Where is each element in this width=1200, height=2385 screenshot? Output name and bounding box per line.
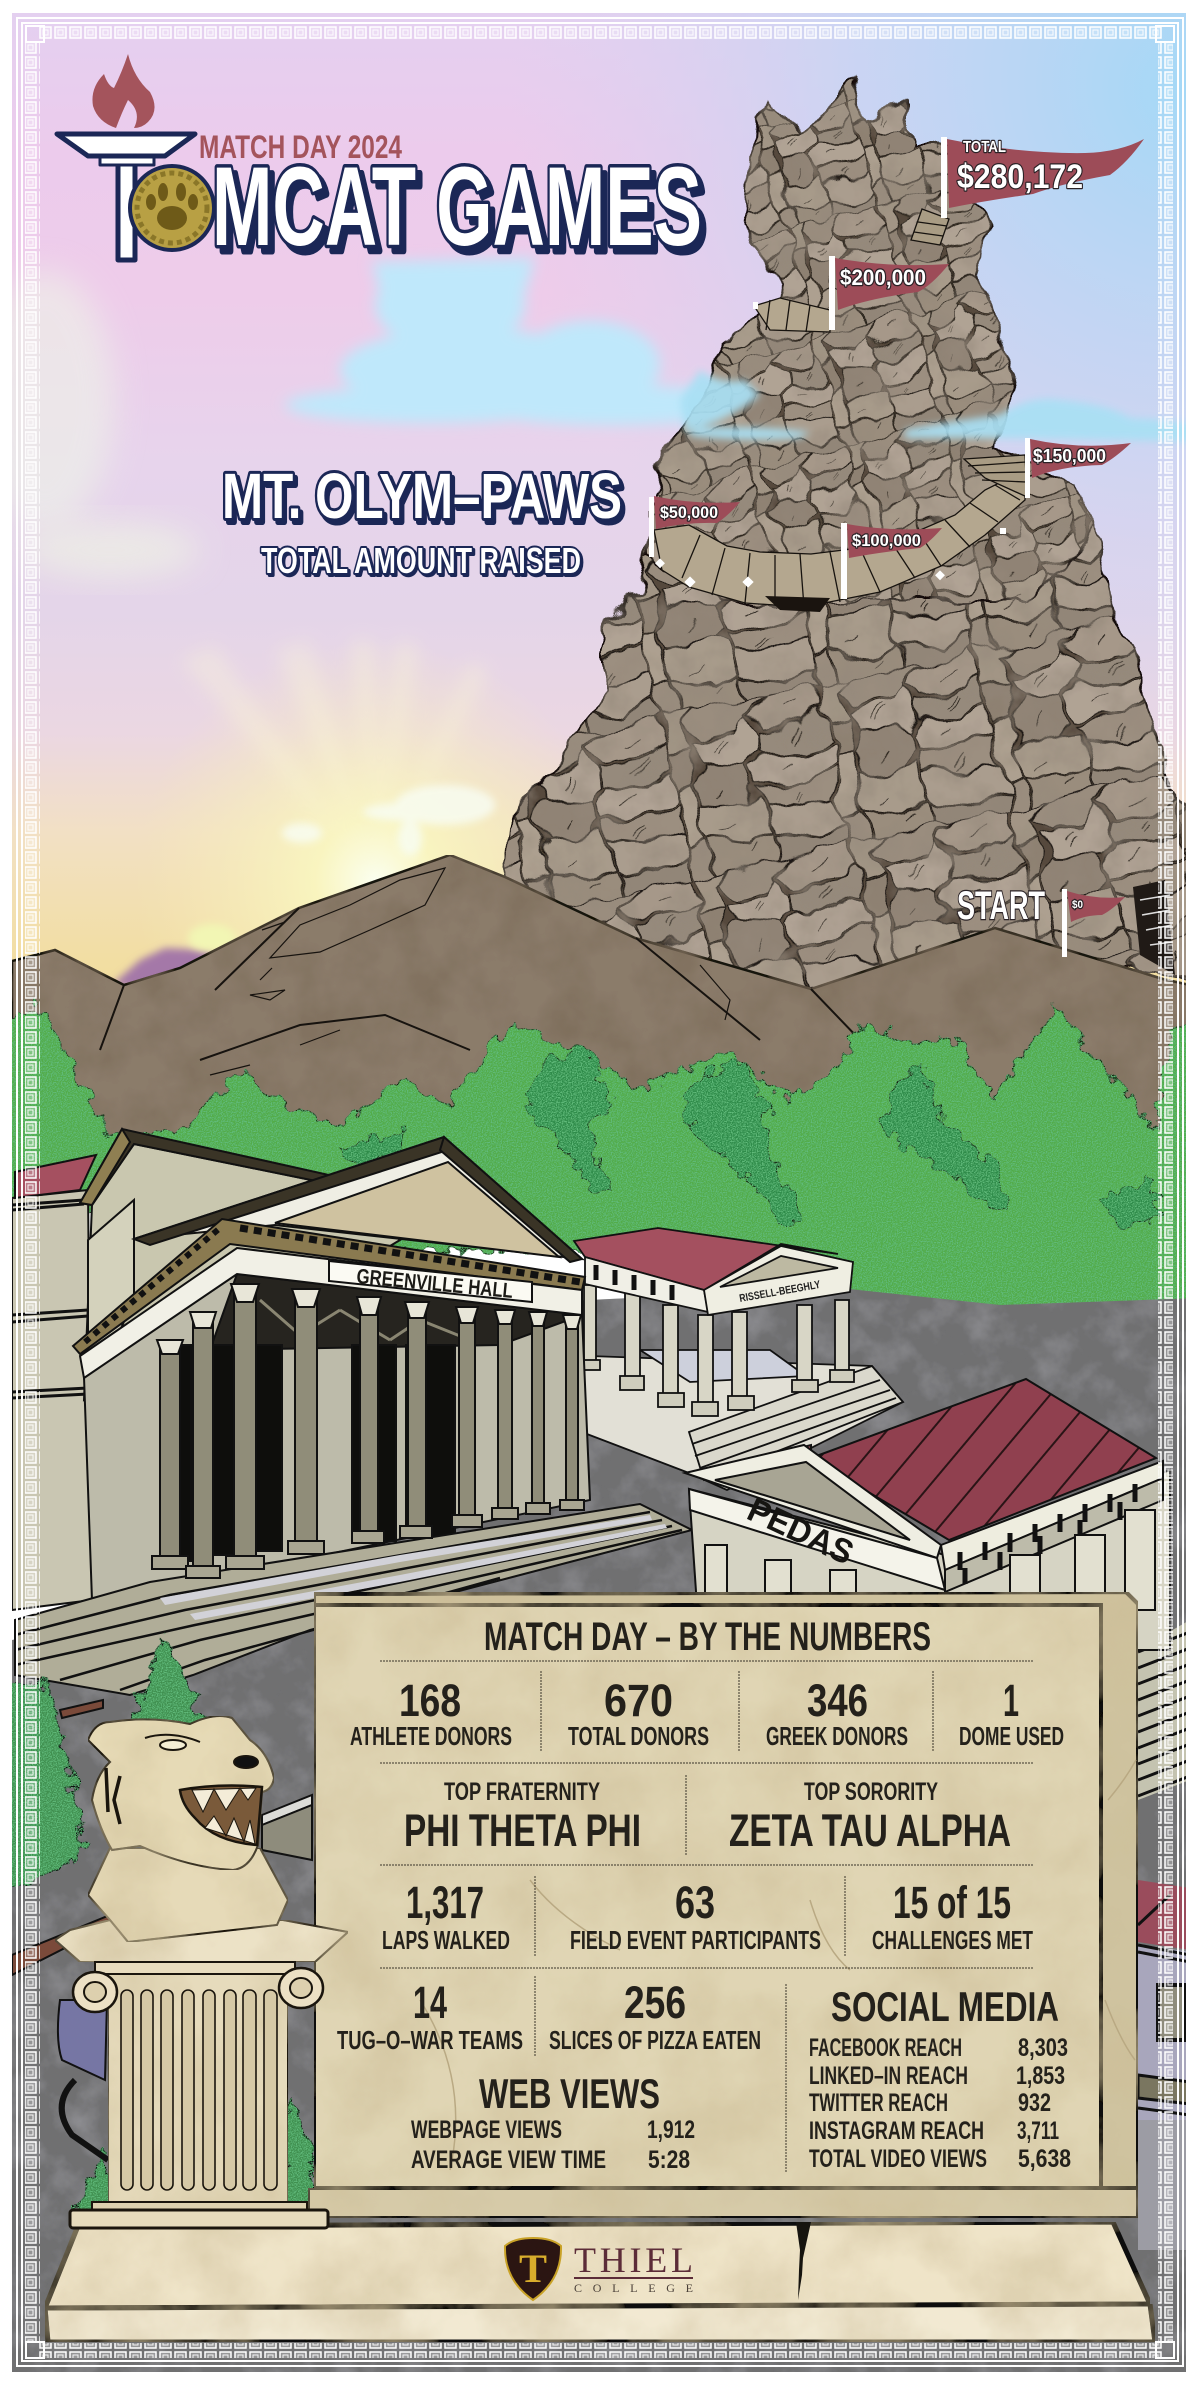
- social media: SOCIAL MEDIA: [831, 1983, 1059, 2030]
- staircase around mountain: [654, 209, 1027, 612]
- stat: athlete donors: [350, 1675, 512, 1751]
- building: Rissell-Beeghly temple: [490, 1228, 903, 1490]
- stat: dome used: 1: [1003, 1675, 1019, 1726]
- social media: TOTAL VIDEO VIEWS: [809, 2145, 987, 2173]
- building: Rissell-Beeghly temple: RISSELL-BEEGHLY: [738, 1279, 822, 1305]
- stat: laps walked: LAPS WALKED: [382, 1925, 510, 1955]
- social media: INSTAGRAM REACH: [809, 2117, 984, 2145]
- mountain: Mt. Olym-paws: [505, 76, 1200, 1000]
- stat: slices of pizza eaten: [549, 1977, 761, 2055]
- section heading: Mt. Olym-paws: MT. OLYM–PAWS: [222, 460, 622, 532]
- social media: 3,711: [1017, 2117, 1059, 2145]
- stat: field event participants: [570, 1877, 821, 1955]
- stone base: [45, 2222, 1155, 2342]
- cloud wisps in front of mountain: [680, 370, 1200, 442]
- logo: Thiel College: THIEL: [574, 2240, 693, 2280]
- stat: tug-o-war teams: 14: [413, 1977, 447, 2028]
- building: Pedas: [685, 1379, 1170, 1650]
- logo: Thiel College: T: [519, 2246, 547, 2291]
- stat: athlete donors: ATHLETE DONORS: [350, 1721, 512, 1751]
- top fraternity: PHI THETA PHI: [404, 1805, 641, 1856]
- building: Greenville Hall: [15, 1129, 692, 1695]
- stat: slices of pizza eaten: 256: [624, 1977, 686, 2028]
- distant purple cloud: [112, 948, 214, 990]
- small trees beside the statue: [0, 1635, 313, 2210]
- statue: tomcat bust on column: [55, 1716, 348, 2228]
- date line: MATCH DAY 2024: [199, 129, 402, 165]
- stat: field event participants: 63: [675, 1877, 715, 1928]
- flag: total: $280,172: [957, 158, 1083, 196]
- crack in base: [796, 2222, 811, 2300]
- flag: $200,000: [829, 256, 949, 330]
- stat: challenges met: 15 of 15: [893, 1877, 1011, 1928]
- stat: laps walked: 1,317: [406, 1877, 484, 1928]
- top sorority: [729, 1778, 1011, 1856]
- icon: paw medallion: [130, 166, 214, 250]
- plaque: match day by the numbers: [308, 1592, 1138, 2218]
- stat: total donors: TOTAL DONORS: [568, 1721, 709, 1751]
- steps of Greenville Hall: [15, 1504, 692, 1695]
- ground: [12, 1288, 1200, 2372]
- flag: $50,000: [649, 496, 740, 557]
- marble veins: [420, 1760, 1136, 2170]
- path markers: [655, 302, 1006, 588]
- web views: 1,912: [647, 2116, 695, 2144]
- stat: greek donors: GREEK DONORS: [766, 1721, 908, 1751]
- stat: slices of pizza eaten: SLICES OF PIZZA EATEN: [549, 2025, 761, 2055]
- stat: total donors: [568, 1675, 709, 1751]
- eye, nose and scars: [160, 1740, 186, 1750]
- section rules: [380, 1661, 1034, 2173]
- buildings seen in right margin: [1138, 1620, 1190, 2250]
- stat: total donors: 670: [604, 1675, 673, 1726]
- facade wall and openings: [84, 1274, 590, 1600]
- stat: dome used: [959, 1675, 1064, 1751]
- web views: 5:28: [648, 2146, 690, 2174]
- mouth: [180, 1786, 262, 1845]
- logo: Thiel College: COLLEGE: [574, 2281, 693, 2295]
- sky background: [0, 13, 1186, 1020]
- social media: LINKED–IN REACH: [809, 2062, 968, 2090]
- flag: $200,000: $200,000: [840, 265, 926, 290]
- web views: [411, 2070, 695, 2174]
- stat: athlete donors: 168: [399, 1675, 461, 1726]
- flag: $100,000: [841, 523, 942, 599]
- stat: tug-o-war teams: [337, 1977, 523, 2055]
- flag: $150,000: [1025, 438, 1131, 498]
- path and boards behind the statue: [12, 1700, 312, 2160]
- pedestal column: [55, 1920, 348, 2228]
- bust shoulders: [88, 1848, 288, 1942]
- top sorority: ZETA TAU ALPHA: [729, 1805, 1011, 1856]
- logo: Thiel College: [505, 2238, 693, 2300]
- web views: WEB VIEWS: [479, 2070, 660, 2117]
- stat: greek donors: 346: [807, 1675, 868, 1726]
- web views: AVERAGE VIEW TIME: [411, 2146, 606, 2174]
- top fraternity: TOP FRATERNITY: [444, 1778, 600, 1806]
- flag: $100,000: $100,000: [852, 531, 921, 550]
- social media: FACEBOOK REACH: [809, 2034, 962, 2062]
- brown foothills: [12, 855, 1186, 1136]
- cloud behind the mountain: [285, 258, 750, 425]
- columns: [160, 1287, 578, 1570]
- heading: MATCH DAY – BY THE NUMBERS: [484, 1615, 931, 1659]
- title block: [57, 54, 702, 269]
- social media: 1,853: [1016, 2062, 1065, 2090]
- flag: $150,000: $150,000: [1033, 446, 1106, 466]
- social media: 932: [1018, 2089, 1051, 2117]
- building: Pedas: PEDAS: [742, 1491, 859, 1573]
- stat: field event participants: FIELD EVENT PARTICIPANTS: [570, 1925, 821, 1955]
- icon: torch flame: [92, 54, 155, 128]
- stat: challenges met: CHALLENGES MET: [872, 1925, 1033, 1955]
- flag: $50,000: $50,000: [660, 503, 718, 522]
- start flag: $0: [1072, 899, 1083, 911]
- stat: laps walked: [382, 1877, 510, 1955]
- title wordmark: MCAT GAMES: [212, 144, 702, 269]
- top fraternity: [404, 1778, 641, 1856]
- building: Greenville Hall: GREENVILLE HALL: [356, 1265, 514, 1303]
- stat: tug-o-war teams: TUG–O–WAR TEAMS: [337, 2025, 523, 2055]
- social media: TWITTER REACH: [809, 2089, 948, 2117]
- social media: 5,638: [1018, 2145, 1071, 2173]
- social media: 8,303: [1018, 2034, 1068, 2062]
- icon: torch: [57, 134, 195, 260]
- head: [88, 1716, 274, 1870]
- building: left wing: [12, 1155, 96, 1610]
- stone slab: [308, 1592, 1138, 2218]
- tree line: [0, 1005, 1200, 1310]
- flag: total: [941, 137, 1144, 218]
- start flag: START: [957, 884, 1045, 928]
- stat: challenges met: [872, 1877, 1033, 1955]
- top sorority: TOP SORORITY: [804, 1778, 938, 1806]
- web views: WEBPAGE VIEWS: [411, 2116, 562, 2144]
- social media: [809, 1983, 1071, 2173]
- flag: total: TOTAL: [963, 139, 1006, 156]
- stat: dome used: DOME USED: [959, 1721, 1064, 1751]
- start flag: [957, 880, 1175, 975]
- section heading: Mt. Olym-paws: [222, 460, 622, 581]
- section heading: Mt. Olym-paws: TOTAL AMOUNT RAISED: [261, 540, 581, 581]
- stat: greek donors: [766, 1675, 908, 1751]
